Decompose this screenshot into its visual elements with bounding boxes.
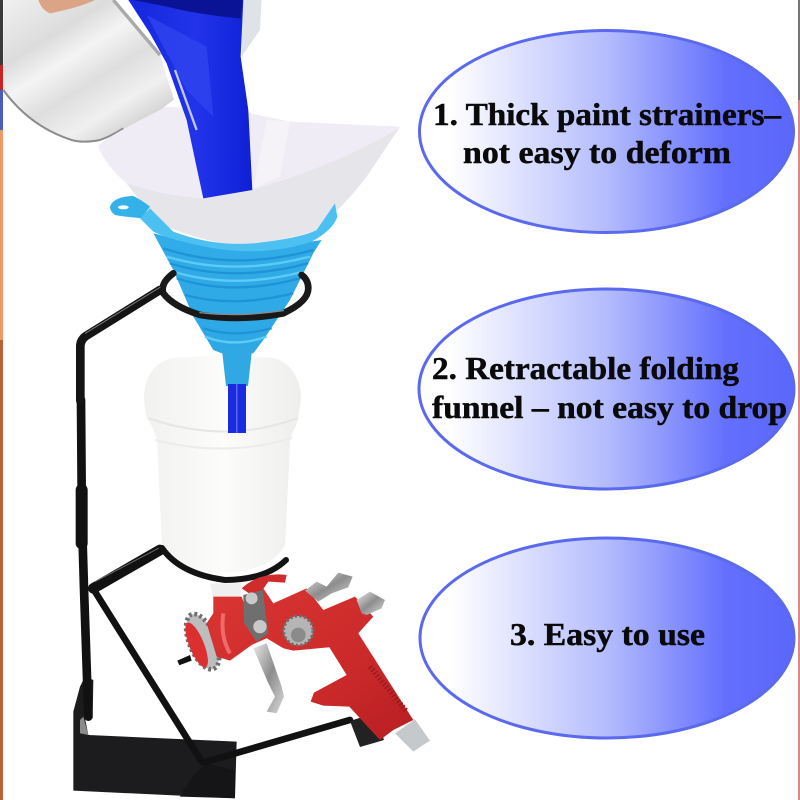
stand: post and frame — [81, 400, 350, 763]
gun rear knob — [357, 592, 385, 615]
paint stream — [128, 0, 252, 198]
upper ring of stand — [80, 273, 308, 401]
gun pin — [177, 655, 192, 665]
gun air fitting — [395, 719, 430, 752]
funnel body — [153, 233, 322, 353]
callout 2 text: funnel – not easy to drop — [432, 389, 787, 425]
right edge strip — [798, 0, 800, 800]
callout 3 — [420, 538, 794, 738]
gun cap — [179, 609, 226, 674]
hand — [38, 0, 95, 13]
callout 1 — [420, 30, 794, 232]
callout 1 text: 1. Thick paint strainers– — [433, 96, 782, 132]
callout 2 text — [432, 350, 787, 425]
gun silver plate — [243, 590, 268, 642]
gun trigger — [253, 643, 284, 713]
callout 1 text: not easy to deform — [463, 134, 731, 170]
stand: base plate — [73, 677, 237, 798]
gun hook — [242, 574, 287, 598]
funnel spout over cup — [222, 350, 252, 386]
collapsible funnel — [110, 196, 337, 353]
callout 2 — [419, 289, 794, 489]
gun upper valve — [305, 573, 353, 602]
funnel tab — [110, 196, 150, 218]
icon: paint can — [3, 0, 262, 142]
paper strainer — [98, 107, 400, 245]
mixing cup — [144, 356, 301, 573]
gun body — [207, 588, 413, 740]
paint drip — [228, 384, 246, 433]
callout 1 text — [433, 96, 782, 170]
stand: rear bracket — [350, 713, 384, 747]
spray gun — [177, 573, 430, 752]
left edge strip — [0, 0, 3, 800]
callout 2 text: 2. Retractable folding — [432, 350, 739, 386]
gun knob — [284, 616, 313, 645]
funnel rim — [140, 203, 337, 251]
lower ring of stand — [162, 548, 286, 580]
callout 3 text: 3. Easy to use — [510, 616, 705, 652]
